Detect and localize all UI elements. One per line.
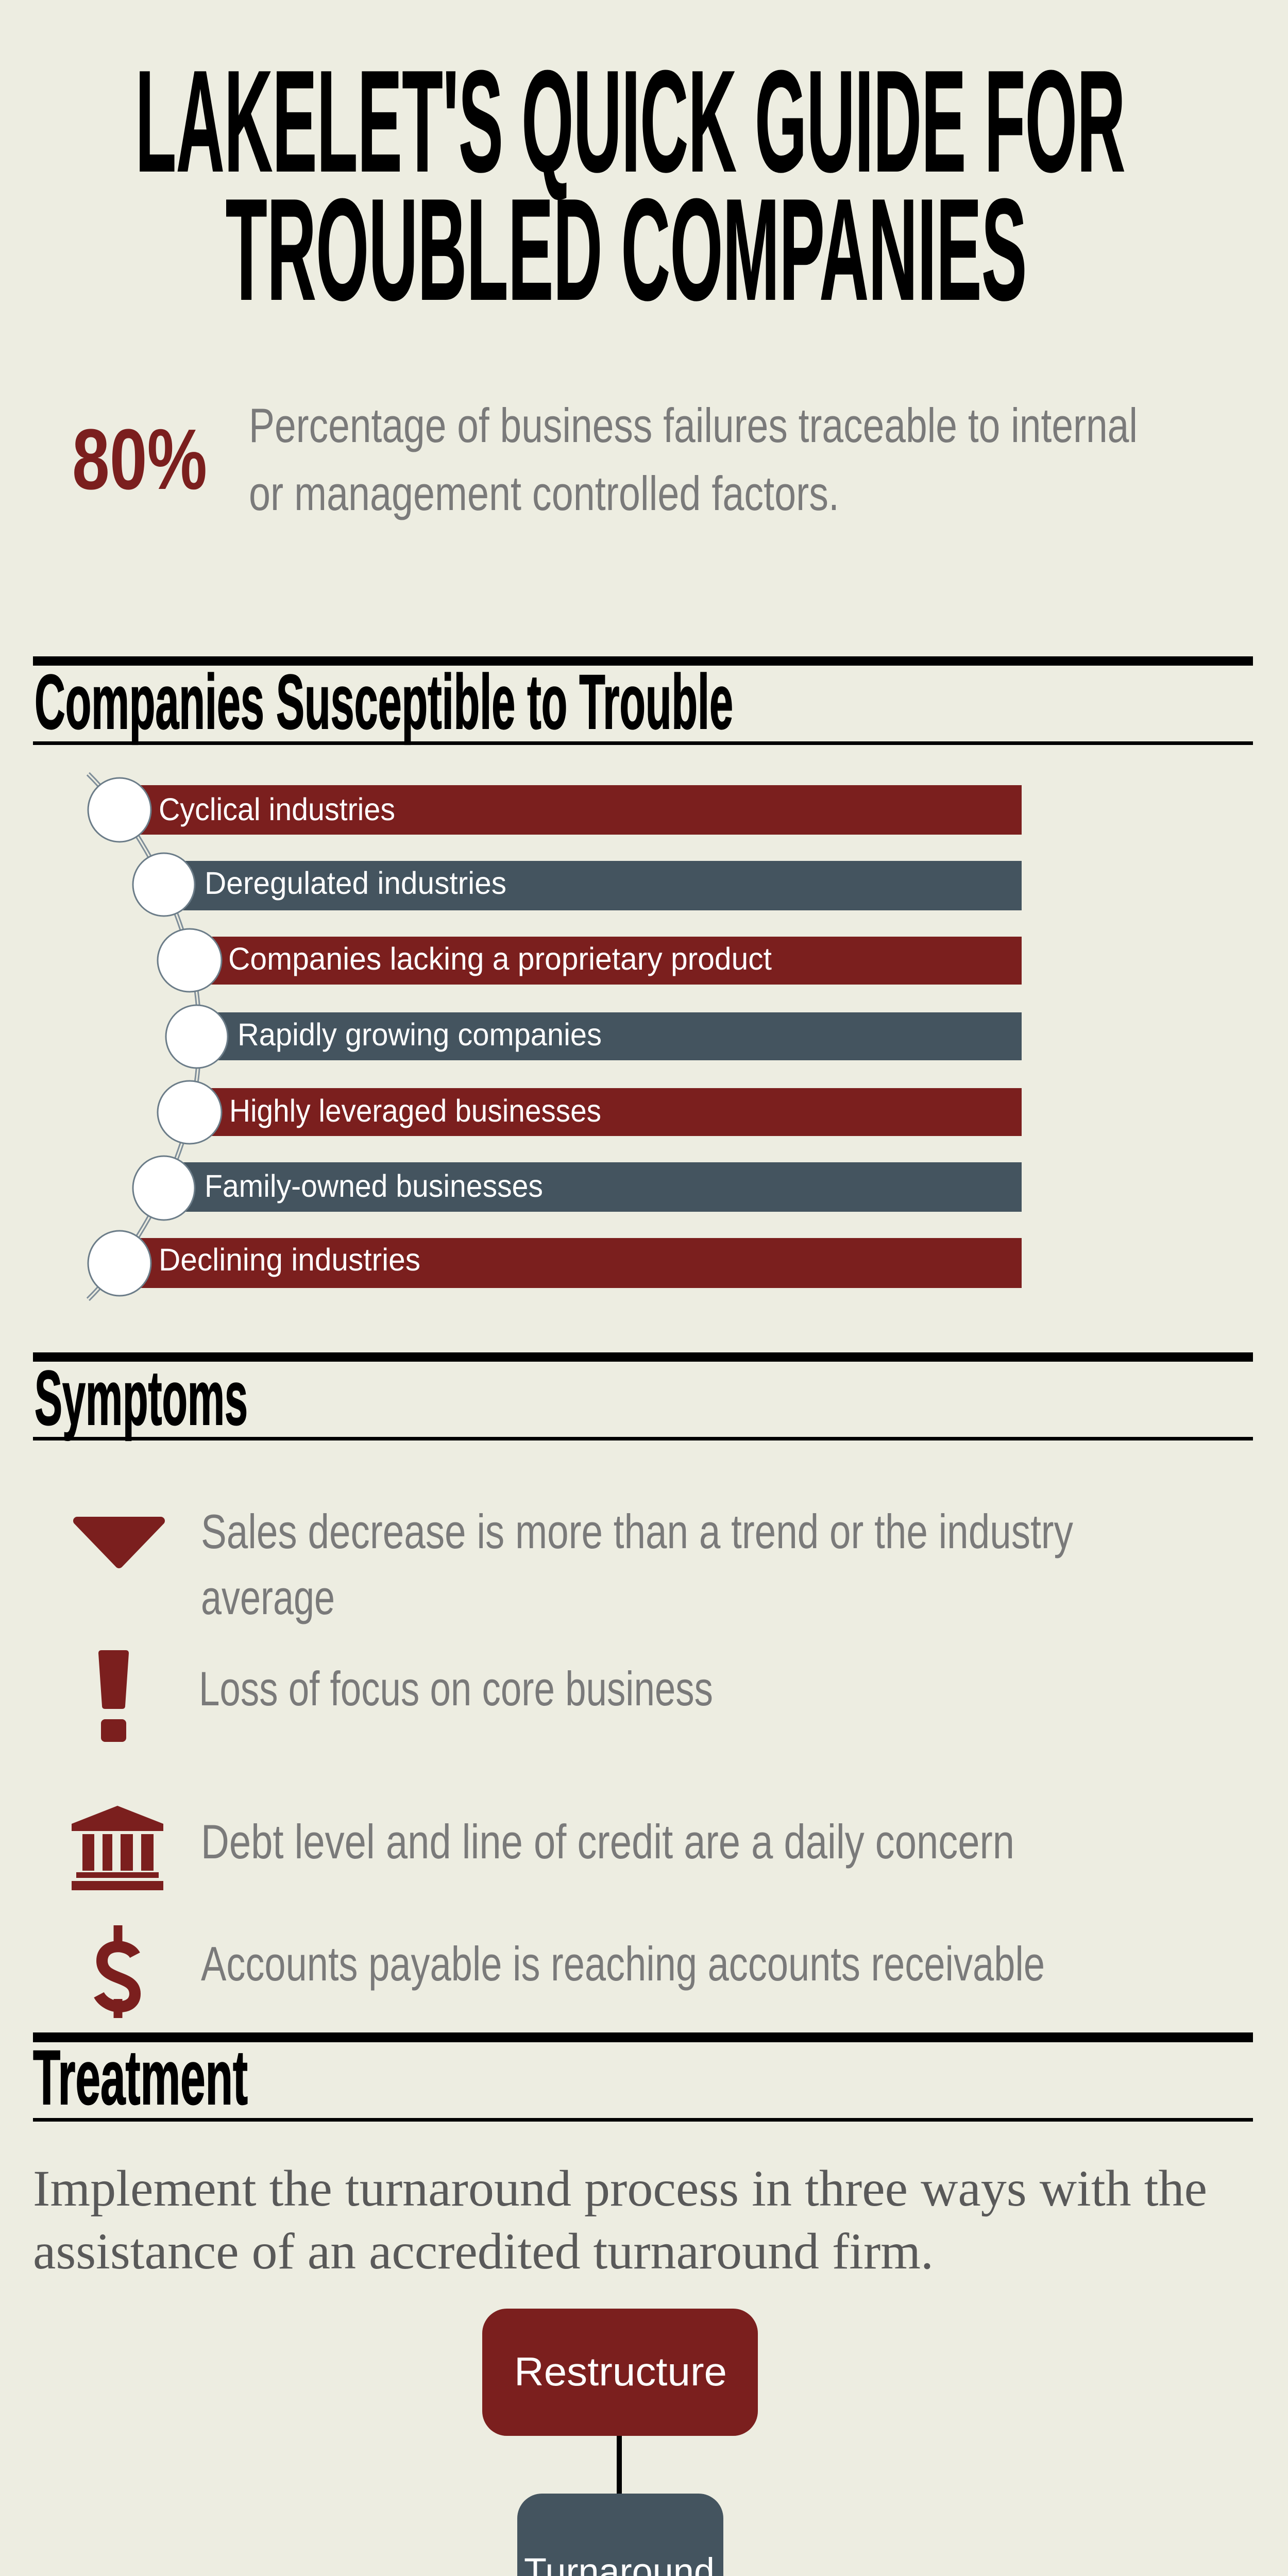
icon: dollar sign xyxy=(99,1925,135,2018)
symptom: accounts payable: Accounts payable is reaching accounts receivable xyxy=(201,1937,1045,1991)
icon: down triangle xyxy=(77,1521,161,1564)
symptom: loss of focus xyxy=(98,1650,713,1742)
section heading: companies susceptible to trouble: Companies Susceptible to Trouble xyxy=(35,658,733,745)
icon: exclamation mark xyxy=(98,1650,129,1742)
list item: highly leveraged businesses xyxy=(158,1081,1022,1144)
text block: treatment intro xyxy=(33,2160,1207,2280)
section heading: symptoms xyxy=(33,1352,1253,1441)
diagram: turnaround options xyxy=(364,2309,875,2576)
connector lines xyxy=(491,2436,748,2576)
box: restructure xyxy=(482,2309,758,2436)
section heading: treatment: Treatment xyxy=(33,2034,248,2121)
symptom: sales decrease xyxy=(77,1504,1073,1624)
list item: family-owned businesses: Family-owned businesses xyxy=(205,1168,543,1204)
list item: highly leveraged businesses: Highly leveraged businesses xyxy=(229,1093,601,1128)
icon: bank xyxy=(72,1806,163,1890)
list item: rapidly growing companies xyxy=(166,1005,1022,1068)
symptom: sales decrease: Sales decrease is more than a trend or the industry xyxy=(201,1504,1073,1558)
text block: treatment intro: assistance of an accredited turnaround firm. xyxy=(33,2223,934,2280)
list item: family-owned businesses xyxy=(133,1156,1022,1220)
symptom: debt level: Debt level and line of credit are a daily concern xyxy=(201,1815,1014,1869)
list item: companies lacking a proprietary product xyxy=(158,929,1022,992)
list item: declining industries xyxy=(88,1231,1022,1296)
section heading: treatment xyxy=(33,2032,1253,2122)
list item: deregulated industries xyxy=(133,853,1022,916)
connector arc xyxy=(88,774,199,1299)
list item: deregulated industries: Deregulated industries xyxy=(205,866,506,901)
list item: cyclical industries: Cyclical industries xyxy=(159,792,395,827)
statistic: 80 percent: 80% xyxy=(72,412,207,507)
box: restructure: Restructure xyxy=(514,2349,727,2394)
list: susceptible companies xyxy=(88,774,1022,1299)
section heading: symptoms: Symptoms xyxy=(35,1354,248,1441)
list item: cyclical industries xyxy=(88,778,1022,842)
list item: declining industries: Declining industries xyxy=(159,1242,420,1277)
text block: treatment intro: Implement the turnaround process in three ways with the xyxy=(33,2160,1207,2217)
statistic: 80 percent: or management controlled factors. xyxy=(249,466,839,520)
list item: rapidly growing companies: Rapidly growing companies xyxy=(238,1017,602,1052)
symptom: debt level xyxy=(72,1806,1014,1890)
title xyxy=(135,41,1125,330)
symptom: sales decrease: average xyxy=(201,1570,335,1624)
list item: companies lacking a proprietary product: Companies lacking a proprietary product xyxy=(228,941,772,976)
box: turnaround xyxy=(517,2494,723,2576)
symptom: loss of focus: Loss of focus on core business xyxy=(199,1662,713,1716)
statistic: 80 percent xyxy=(72,398,1138,520)
symptom: accounts payable xyxy=(99,1925,1045,2018)
